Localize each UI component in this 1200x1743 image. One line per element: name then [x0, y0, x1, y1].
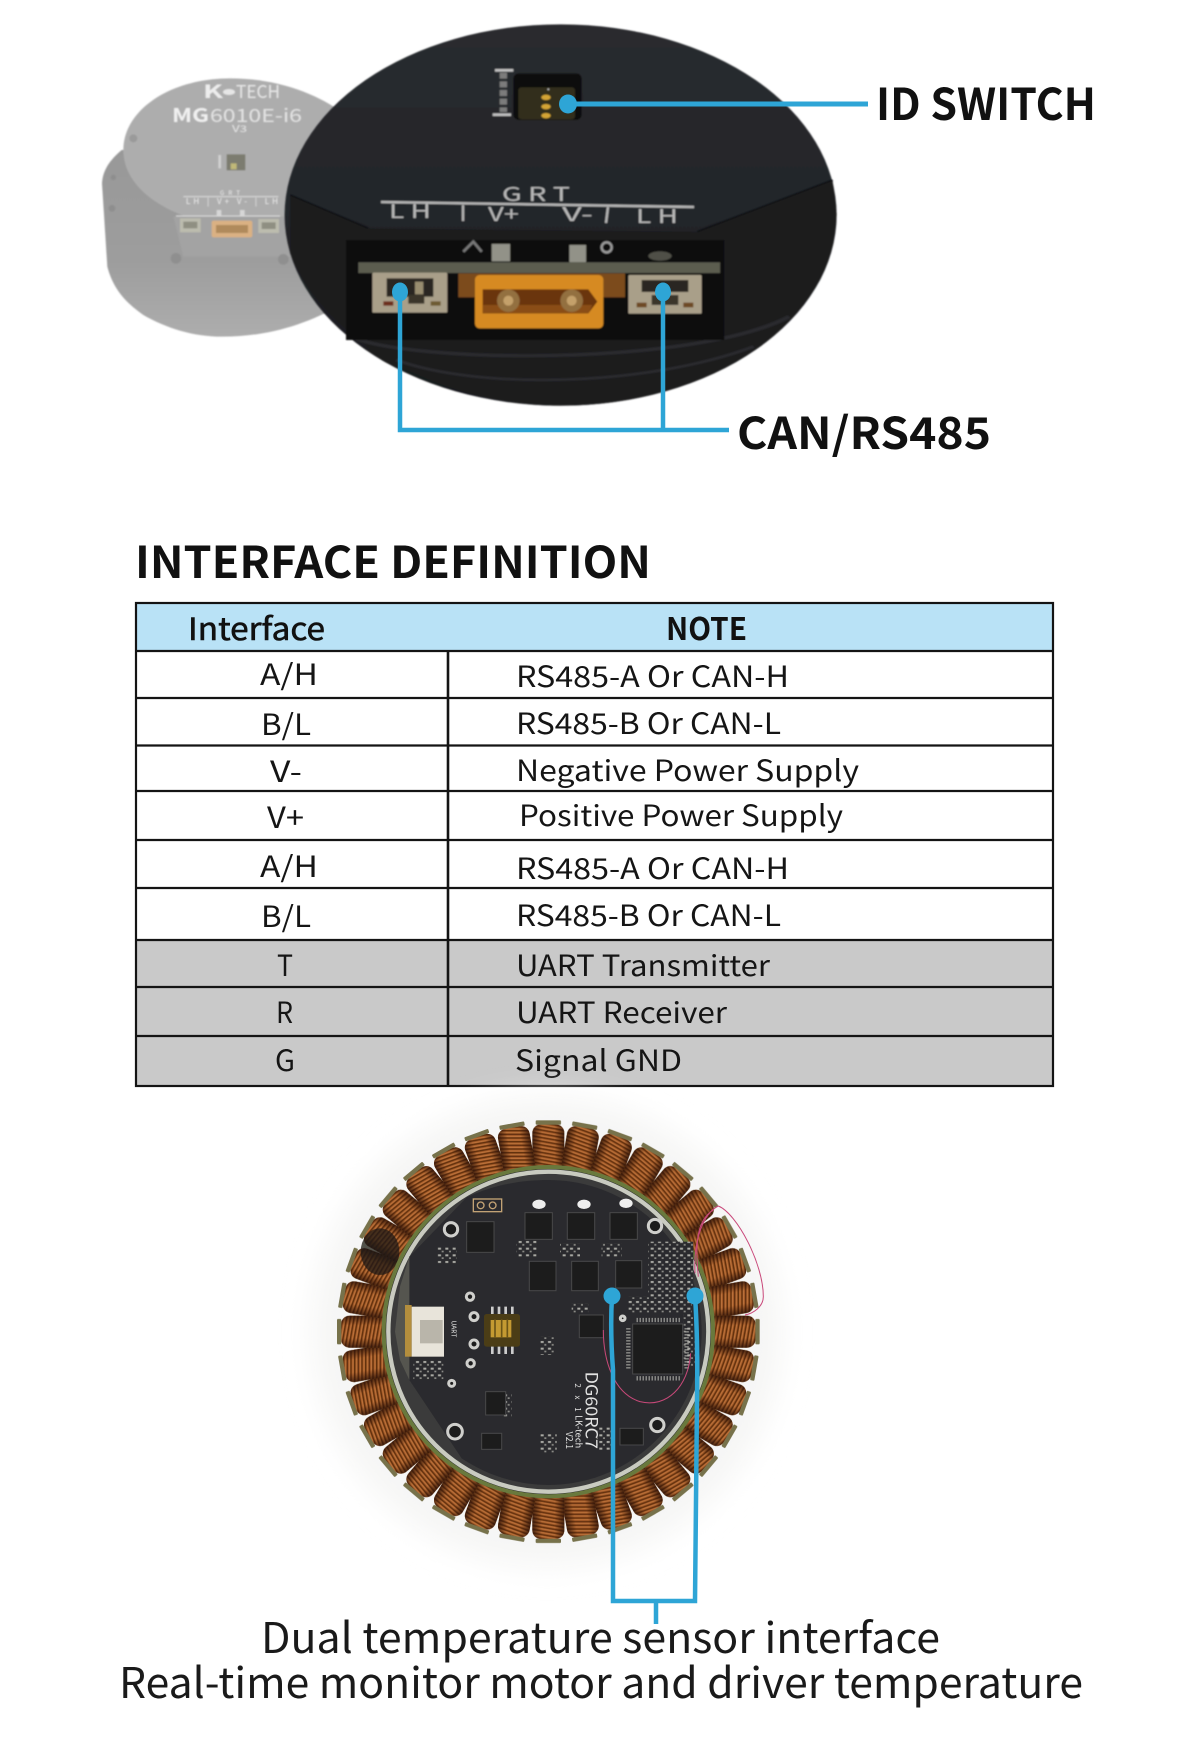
gray motor behind: LH | V+ V- | LH — [186, 196, 278, 207]
row: V-: Negative Power Supply — [516, 748, 859, 790]
table header: NOTE — [666, 604, 747, 649]
connector recess — [346, 240, 724, 340]
row: G — [275, 1038, 682, 1080]
ID switch — [493, 69, 582, 120]
board labels: V2.1 — [563, 1432, 577, 1449]
row: G: G — [275, 1038, 295, 1080]
right terminal — [628, 275, 702, 314]
caption line 1: Dual temperature sensor interface — [261, 1605, 940, 1666]
row: A/H: A/H — [260, 652, 318, 694]
black enlarged circle: V+ — [488, 200, 519, 227]
board labels: UART — [449, 1321, 459, 1337]
black enlarged circle: L H — [636, 202, 678, 229]
white connector — [405, 1305, 444, 1357]
row: A/H second — [260, 844, 789, 888]
header pads — [473, 1199, 502, 1212]
table header: Interface — [188, 604, 325, 649]
row: B/L second: B/L — [261, 894, 311, 936]
table grid — [136, 603, 1053, 1086]
MCU pins — [628, 1320, 687, 1378]
CAN/RS485 callout lines — [392, 282, 729, 430]
row: G: Signal GND — [515, 1038, 682, 1080]
board labels: 2x1 — [572, 1383, 583, 1412]
board labels — [449, 1321, 605, 1449]
dip switch — [484, 1307, 520, 1354]
gray motor behind: 6010E-i6 — [210, 102, 302, 128]
black enlarged circle: G R T — [502, 180, 570, 207]
row: B/L second — [261, 893, 781, 936]
heading: interface definition: INTERFACE DEFINITION — [135, 527, 651, 591]
panel: interface table — [136, 603, 1053, 1086]
row: B/L second: RS485-B Or CAN-L — [516, 893, 781, 935]
table header — [136, 603, 1053, 651]
temperature sensor callout lines — [604, 1288, 704, 1624]
row: T — [277, 943, 771, 985]
row: R: R — [276, 990, 293, 1032]
gray motor behind: TECH — [236, 78, 280, 104]
label: CAN/RS485: CAN/RS485 — [737, 398, 991, 462]
row: A/H — [260, 652, 789, 696]
row: A/H: RS485-A Or CAN-H — [516, 654, 789, 696]
gray motor behind: V3 — [232, 122, 247, 135]
board labels: DG60RC7 — [581, 1372, 605, 1449]
chips — [467, 1213, 683, 1449]
green ring — [384, 1167, 713, 1496]
row: V+ — [267, 793, 843, 837]
row: T: UART Transmitter — [516, 943, 771, 985]
caption line 2: Real-time monitor motor and driver temperature — [119, 1650, 1083, 1711]
row: B/L: B/L — [261, 702, 311, 744]
gray motor behind: MG — [172, 101, 209, 128]
ID switch callout line — [559, 94, 868, 114]
soft photo backdrop — [312, 1097, 782, 1567]
stator photo — [337, 1120, 763, 1543]
row: R — [276, 990, 728, 1032]
row: A/H second: A/H — [260, 844, 318, 886]
XT30 power connector — [458, 273, 625, 328]
gray motor behind: K — [203, 78, 224, 104]
row: V- — [270, 748, 859, 791]
burnt coil patch — [361, 1228, 399, 1275]
row: V-: V- — [270, 749, 302, 791]
gray motor behind: GRT — [220, 188, 240, 197]
label: ID SWITCH: ID SWITCH — [876, 69, 1096, 133]
gray motor behind — [102, 78, 343, 337]
left terminal — [372, 273, 447, 313]
pink wires — [603, 1206, 763, 1403]
board labels: LK-tech — [573, 1415, 587, 1448]
row: B/L — [261, 701, 781, 744]
black enlarged circle: L H — [389, 197, 431, 224]
panel: motor photo with callouts — [102, 24, 1096, 462]
row: A/H second: RS485-A Or CAN-H — [516, 846, 789, 888]
row: T: T — [277, 943, 293, 985]
driver board — [395, 1180, 763, 1485]
row: R: UART Receiver — [516, 990, 728, 1032]
gray UART rows — [136, 940, 1053, 1086]
row: B/L: RS485-B Or CAN-L — [516, 701, 781, 743]
mounting holes and pads — [444, 1219, 664, 1439]
stator coils — [337, 1120, 760, 1543]
black enlarged circle — [285, 24, 837, 406]
row: V+: Positive Power Supply — [519, 793, 843, 835]
black enlarged circle: V- — [562, 200, 593, 227]
white top pads — [532, 1199, 633, 1209]
panel: stator and driver board photo — [312, 1097, 782, 1624]
row: V+: V+ — [267, 795, 304, 837]
speck components — [648, 1242, 693, 1300]
